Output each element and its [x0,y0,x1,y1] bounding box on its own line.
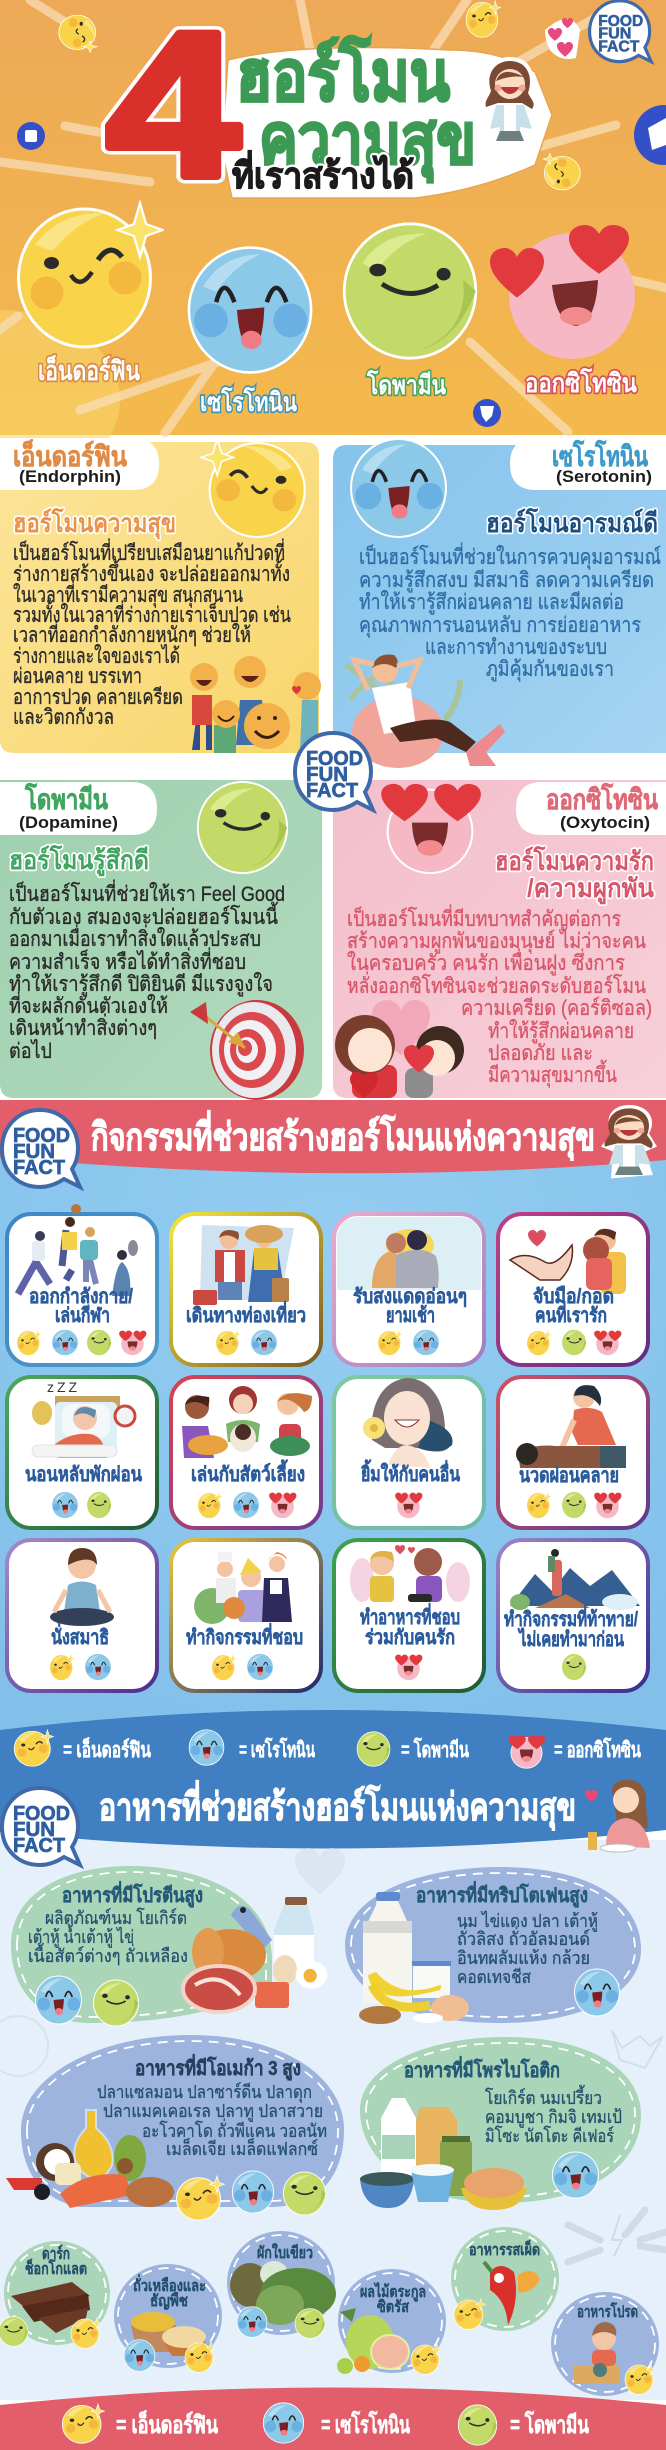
badge: food fun fact: FOOD [598,13,643,30]
bubble: dark chocolate [0,2241,110,2348]
legend: oxytocin [509,1735,641,1768]
body text: ทำให้เรารู้สึกดี ปิติยินดี มีแรงจูงใจ [9,972,273,997]
activity label: ไม่เคยทำมาก่อน [518,1627,624,1651]
card: cook together [334,1540,484,1691]
character: blue face [351,439,446,537]
name tab: โดพามีน [24,782,108,815]
hormone faces [198,1492,296,1518]
badge: center food fun fact: FACT [306,780,358,802]
label [25,2244,87,2278]
legend: serotonin: = เซโรโทนิน [239,1737,315,1762]
card: hug [498,1214,648,1365]
body text: เป็นฮอร์โมนที่มีบทบาทสำคัญต่อการ [347,904,621,931]
hormone faces [527,1330,621,1355]
body text [359,542,661,682]
activity label: เล่นกับสัตว์เลี้ยง [191,1459,305,1486]
face [625,2364,656,2394]
icon: blue thumbs down [473,399,501,427]
body text: และการทำงานของระบบ [425,636,607,659]
faces [237,2307,325,2338]
label: อาหารโปรด [577,2301,638,2321]
body text: ปลาแมคเคอเรล ปลาทู ปลาสวาย [103,2101,323,2122]
illustration: citrus fruits [337,2308,409,2374]
bubble: protein foods [11,1866,327,2026]
character: pink face [381,784,481,873]
bubble: leafy greens [227,2231,336,2338]
zzz text: z Z Z [47,1379,77,1395]
body text [9,879,285,1063]
faces [124,2340,216,2372]
body text: เนื้อสัตว์ต่างๆ ถั่วเหลือง [28,1943,188,1966]
bubble: soy and grains [114,2264,222,2372]
illustration: couple with hearts [335,1000,464,1098]
body text: อินทผลัมแห้ง กล้วย [457,1948,590,1968]
illustration: tryptophan food [359,1892,469,2024]
hormone faces [395,1493,422,1518]
hormone faces [527,1492,621,1518]
activity label: เล่นกีฬา [55,1304,110,1327]
decor: faint doodles [0,1848,666,2262]
body text [485,2085,622,2146]
card: sleep [7,1377,157,1528]
body text: คอมบูชา กิมจิ เทมเป้ [485,2107,622,2128]
badge: food fun fact: FACT [13,1835,65,1857]
panel: serotonin [333,438,666,768]
card: challenge [498,1540,648,1691]
activity label: ทำอาหารที่ชอบ [360,1602,460,1629]
badge: food fun fact [2,1110,80,1187]
name tab [510,438,666,490]
icon: blue thumbs left [17,122,45,150]
activity label: นวดผ่อนคลาย [519,1465,619,1487]
badge: food fun fact [2,1788,80,1865]
hormone faces [212,1654,273,1680]
body text: ทำให้รู้สึกผ่อนคลาย [488,1019,634,1044]
label: ถั่วเหลืองและ [133,2274,206,2295]
illustration: relaxing woman [345,655,505,768]
face [574,1969,620,2016]
body text: โยเกิร์ต นมเปรี้ยว [485,2085,602,2108]
title line: hormones: ฮอร์โมน [236,35,450,115]
face [454,2299,486,2329]
body text: ในครอบครัว คนรัก เพื่อนฝูง ซึ่งการ [347,948,625,976]
label: ช็อกโกแลต [25,2257,87,2278]
icon: blue thumbs right [634,105,666,165]
body text: ปลอดภัย และ [488,1042,593,1065]
illustration: people with pets [182,1386,312,1458]
badge: food fun fact: FUN [598,26,631,43]
body text: ปลาแซลมอน ปลาซาร์ดีน ปลาดุก [97,2082,312,2103]
title line: happiness: ความสุข [259,100,476,183]
illustration: boy eating [574,2322,620,2384]
icon: cheering girl [482,57,538,145]
body text: ร่างกายและใจของเราได้ [13,644,180,668]
faces [176,2171,326,2220]
hormone faces [50,1654,111,1680]
activity label: คนที่เรารัก [535,1300,607,1327]
section: activities [0,1100,666,1740]
illustration: protein food [183,1897,327,2012]
body text: เมล็ดเจีย เมล็ดแฟลกซ์ [166,2137,318,2159]
badge: center food fun fact: FUN [306,764,348,786]
body text: เป็นฮอร์โมนที่เปรียบเสมือนยาแก้ปวดที่ [13,538,285,565]
body text: ผลิตภัณฑ์นม โยเกิร์ต [45,1907,187,1928]
label: endorphin: เอ็นดอร์ฟิน [38,353,140,386]
icon: small emoji top [466,1,501,37]
legend: serotonin [263,2403,410,2443]
legend: endorphin: = เอ็นดอร์ฟิน [63,1736,151,1762]
body text: คอตเทจชีส [457,1967,531,1987]
hormone faces [52,1492,111,1518]
activity label [533,1285,614,1327]
face [411,2344,442,2374]
body text: เต้าหู้ น้ำเต้าหู้ ไข่ [28,1924,134,1948]
legend: serotonin: = เซโรโทนิน [321,2410,410,2439]
card: sunlight [334,1214,484,1365]
illustration: grains [131,2312,206,2356]
heading: อาหารที่มีโอเมก้า 3 สูง [135,2053,301,2082]
activity label [29,1286,133,1327]
activity label: ยามเช้า [386,1304,435,1327]
bubble: tryptophan foods [345,1867,641,2024]
face [552,2152,599,2198]
illustration: sleeping man [32,1396,135,1458]
card: massage [498,1377,648,1528]
label: ผักใบเขียว [257,2243,313,2262]
hormone faces [17,1330,146,1355]
hormone faces [216,1330,277,1355]
body text [13,538,291,729]
name tab: (Endorphin) [19,467,121,486]
label: ธัญพืช [150,2292,188,2311]
body text: มีความสุขมากขึ้น [488,1060,617,1088]
body text: ต่อไป [9,1039,52,1063]
label [360,2282,426,2316]
label: oxytocin: ออกซิโทซิน [525,367,637,398]
badge: food fun fact: FUN [13,1141,55,1163]
body text: ทำให้เรารู้สึกผ่อนคลาย และมีผลต่อ [359,590,624,615]
card: favorite activity [171,1540,321,1691]
body text: ภูมิคุ้มกันของเรา [486,658,614,682]
subheading: ฮอร์โมนความสุข [13,507,176,540]
panel: oxytocin [333,780,666,1098]
character: yellow endorphin [18,203,162,347]
subheading: ฮอร์โมนรู้สึกดี [9,844,149,877]
faces [0,2317,102,2348]
label: dopamine: โดพามีน [366,369,446,400]
activity label: รับสงแดดอ่อนๆ [353,1286,467,1308]
hormone faces [395,1655,422,1680]
name tab [516,782,666,835]
badge: food fun fact: FACT [13,1157,65,1179]
card: pets [171,1377,321,1528]
title line: that we can create: ที่เราสร้างได้ [232,150,414,196]
badge: food fun fact [590,1,651,62]
legend: endorphin [14,1730,151,1766]
label [133,2274,206,2311]
badge: center food fun fact [295,733,373,810]
icon: hearts sticker [545,18,580,59]
hormone faces [378,1330,439,1355]
legend: dopamine [458,2405,589,2445]
body text: เป็นฮอร์โมนที่ช่วยให้เรา Feel Good [9,879,285,906]
legend: dopamine: = โดพามีน [510,2410,589,2439]
name tab: (Serotonin) [556,467,652,486]
bubble: probiotic foods [360,2037,641,2210]
hormone faces [562,1654,586,1680]
body text [347,904,652,1088]
badge: center food fun fact: FOOD [306,748,363,770]
legend: endorphin: = เอ็นดอร์ฟิน [116,2410,218,2439]
legend: dopamine [357,1732,469,1766]
label: ซิตรัส [377,2298,409,2316]
card: meditation [7,1540,157,1691]
badge: food fun fact: FACT [598,38,640,55]
legend: serotonin [189,1730,315,1765]
label: ดาร์ก [42,2244,70,2263]
subheading line 2: /ความผูกพัน [527,873,654,905]
card: travel [171,1214,321,1365]
name tab [0,782,157,835]
character: green dopamine [344,224,476,358]
name tab: (Oxytocin) [560,813,650,832]
illustration: meditating boy [50,1548,114,1626]
icon: girl eating [585,1780,650,1852]
illustration: travelers [193,1225,294,1305]
activity label: เดินทางท่องเที่ยว [186,1300,306,1327]
illustration: holding hands and hugging [510,1229,626,1294]
body text: อะโวคาโด ถั่วพีแคน วอลนัท [142,2118,327,2141]
title line: that we can create: ที่เราสร้างได้ [232,150,414,196]
body text: เดินหน้าทำสิ่งต่างๆ [9,1013,157,1040]
body text: นม ไข่แดง ปลา เต้าหู้ [457,1910,598,1932]
icon: cheering girl [601,1105,657,1178]
panel: endorphin [0,438,321,753]
badge: food fun fact: FUN [13,1819,55,1841]
icon: small emoji right [543,153,580,190]
activity label: ร่วมกับคนรัก [365,1627,455,1649]
legend: endorphin [62,2404,218,2443]
body text: ในเวลาที่เรามีความสุข สนุกสนาน [13,580,243,608]
label: serotonin: เซโรโทนิน [200,386,297,417]
legend: dopamine: = โดพามีน [401,1737,469,1762]
activity label: นั่งสมาธิ [51,1622,109,1649]
body text: เวลาที่ออกกำลังกายหนักๆ ช่วยให้ [13,620,251,647]
name tab: เอ็นดอร์ฟิน [13,439,127,472]
body text: อาการปวด คลายเครียด [13,686,183,709]
label: อาหารรสเผ็ด [469,2238,540,2259]
name tab: (Dopamine) [19,813,118,832]
body text [97,2082,327,2159]
illustration: hobbies [194,1552,292,1624]
illustration: target with arrow [190,1000,304,1100]
faces [35,1976,139,2026]
heading: อาหารที่มีทริปโตเฟนสูง [416,1880,588,1909]
illustration: chocolate [11,2282,90,2333]
body text [28,1907,188,1966]
title sticker backing [222,48,552,198]
card: smile [334,1377,484,1528]
activity label [504,1604,638,1651]
panel: dopamine [0,780,322,1100]
section: food background [0,1840,666,2400]
heading: อาหารที่มีโปรตีนสูง [62,1880,203,1909]
illustration: probiotic food [360,2090,527,2210]
body text: รวมทั้งในเวลาที่ร่างกายเราเจ็บปวด เช่น [13,600,291,627]
badge: food fun fact: FOOD [13,1803,70,1825]
illustration: omega 3 food [6,2110,174,2208]
illustration: smiling woman [363,1378,452,1468]
illustration: vegetables [230,2261,336,2325]
activity label [353,1286,467,1327]
body text: มิโซะ นัตโตะ คีเฟอร์ [485,2125,614,2146]
character: yellow face [201,439,305,537]
body text [457,1910,598,1987]
activity label: ออกกำลังกาย/ [29,1286,133,1308]
panel: hero header [0,0,666,490]
body text: ถั่วลิสง ถั่วอัลมอนด์ [457,1926,590,1949]
character: blue serotonin [189,248,311,372]
illustration: massage [516,1385,626,1468]
illustration: hiker on mountain [510,1549,640,1610]
body text: ผ่อนคลาย บรรเทา [13,665,142,688]
body text: ออกมาเมื่อเราทำสิ่งใดแล้วประสบ [9,924,261,951]
activity label [360,1602,460,1649]
illustration: chili [484,2262,540,2325]
banner: bottom legend [0,2388,666,2450]
card: exercise [7,1204,157,1365]
illustration: morning sunshine couple [337,1217,481,1290]
illustration: cooking couple [350,1545,470,1602]
character: pink oxytocin [490,225,635,359]
activity label: จับมือ/กอด [533,1285,614,1308]
illustration: people with emoji [190,656,321,753]
body text: ที่จะผลักดันตัวเองให้ [9,991,168,1018]
activity label: นอนหลับพักผ่อน [25,1464,142,1486]
body text: และวิตกกังวล [13,706,114,729]
bubble: favorite food [551,2292,659,2396]
character: green face [198,782,287,873]
bubble: spicy food [451,2227,559,2331]
icon: small emoji left [59,15,97,53]
name tab [0,438,159,490]
banner [0,1100,666,1173]
body text: ร่างกายสร้างขึ้นเอง จะปล่อยออกมาทั้ง [13,559,290,586]
activity label: ยิ้มให้กับคนอื่น [361,1459,460,1486]
body text: ความสำเร็จ หรือได้ทำสิ่งที่ชอบ [9,947,246,974]
heading: อาหารที่มีโพรไบโอติก [404,2055,560,2082]
badge: food fun fact: FOOD [13,1125,70,1147]
label: ผลไม้ตระกูล [360,2282,426,2303]
banner: legend and food heading [0,1710,666,1865]
activity label: ทำกิจกรรมที่ชอบ [186,1622,303,1649]
illustration: sports people [18,1204,138,1296]
body text: กับตัวเอง สมองจะปล่อยฮอร์โมนนี้ [9,902,278,929]
bubble: citrus [337,2269,446,2374]
bubble: omega 3 foods [6,2035,344,2220]
